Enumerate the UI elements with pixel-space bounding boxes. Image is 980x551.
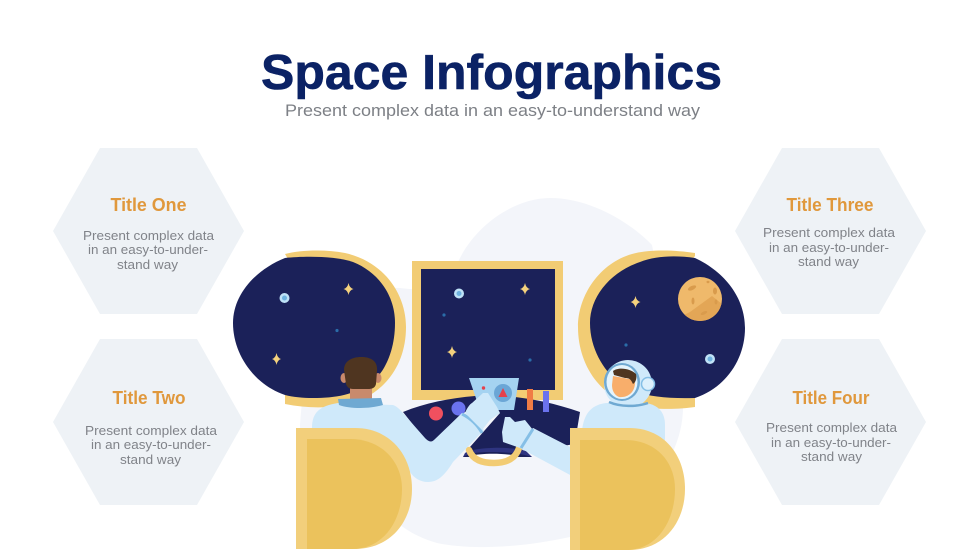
- face: [612, 376, 635, 397]
- left ear: [340, 373, 348, 383]
- icon: planet dot: [705, 354, 715, 364]
- person: astronaut: [502, 360, 665, 476]
- icon: orange planet: [678, 277, 722, 325]
- illustration: space cockpit: [233, 198, 745, 550]
- icon: planet dot: [454, 288, 464, 298]
- text block: title one: Present complex data: [83, 229, 214, 243]
- heading: title one: Title One: [110, 195, 186, 215]
- left seat: [296, 428, 412, 549]
- icon: star: [447, 346, 457, 358]
- cuff: [521, 429, 533, 448]
- suit body: [582, 403, 665, 440]
- desk top: [403, 396, 580, 457]
- icon: orange lever: [527, 389, 533, 410]
- ring inner: [470, 454, 517, 463]
- person: seated crew back view: [312, 357, 500, 482]
- text block: title three: Present complex data: [763, 226, 895, 240]
- right seat: [570, 428, 685, 550]
- icon: star: [520, 283, 530, 295]
- icon: star: [630, 296, 640, 308]
- glove: [465, 393, 500, 430]
- text block: title four: Present complex data: [766, 421, 897, 435]
- heading: title four: Title Four: [792, 388, 870, 408]
- text block: title one: in an easy-to-under-: [88, 243, 208, 257]
- panel: title one: [53, 148, 244, 314]
- helmet side button: [642, 378, 654, 390]
- desk rim: [463, 448, 532, 457]
- icon: planet dot: [280, 293, 290, 303]
- title: Space Infographics: [261, 46, 722, 100]
- text block: title two: Present complex data: [85, 424, 217, 438]
- steering ring: [469, 448, 519, 463]
- text block: title three: in an easy-to-under-: [769, 241, 889, 255]
- body and arm: [312, 403, 484, 482]
- icon: blue button: [452, 402, 466, 416]
- text block: title two: in an easy-to-under-: [91, 438, 211, 452]
- center window: [412, 261, 563, 400]
- text block: title three: stand way: [798, 255, 860, 269]
- hair: [344, 357, 377, 389]
- right porthole: [578, 250, 745, 409]
- tablet screen: [469, 378, 519, 410]
- control desk: [403, 378, 580, 463]
- text block: title one: stand way: [117, 258, 179, 272]
- collar: [338, 398, 383, 408]
- astronaut arm: [520, 428, 572, 476]
- glove: [502, 417, 533, 448]
- helmet: [604, 360, 654, 408]
- left porthole: [233, 250, 406, 407]
- cuff: [462, 414, 482, 433]
- icon: red button: [429, 406, 443, 420]
- panel: title four: [735, 339, 926, 505]
- subtitle: Present complex data in an easy-to-understand way: [285, 101, 701, 120]
- panel: title two: [53, 339, 244, 505]
- heading: title two: Title Two: [112, 388, 186, 408]
- panel: title three: [735, 148, 926, 314]
- background blob: [300, 198, 683, 547]
- text block: title four: in an easy-to-under-: [771, 436, 891, 450]
- text block: title four: stand way: [801, 450, 863, 464]
- icon: blue lever: [543, 391, 549, 412]
- icon: star: [344, 283, 354, 295]
- hair: [613, 369, 636, 384]
- heading: title three: Title Three: [786, 195, 874, 215]
- text block: title two: stand way: [120, 453, 182, 467]
- icon: star: [272, 353, 281, 365]
